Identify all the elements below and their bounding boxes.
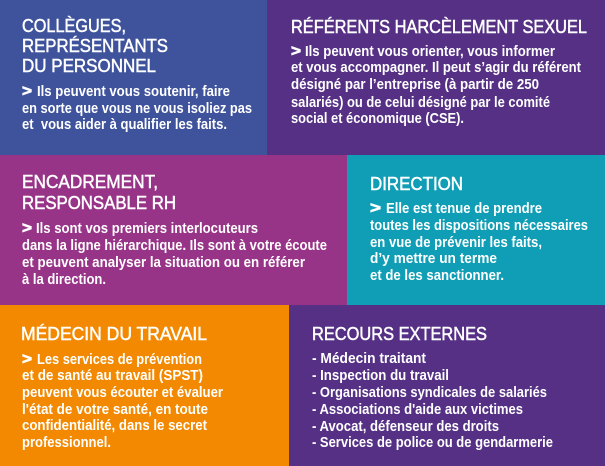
body text: direction [370,200,588,284]
panel background: magenta [0,155,347,305]
panel: encadrement, responsable RH [0,155,347,305]
list: recours externes [312,350,553,451]
body text: encadrement: et peuvent analyser la situation ou en référer [22,254,305,271]
body text: collègues: > [22,83,32,100]
body text: médecin du travail: peuvent vous écouter et évaluer [22,384,223,401]
body text: médecin du travail: et de santé au travail (SPST) [22,367,203,384]
panel: médecin du travail [0,305,289,466]
list: recours externes: - Services de police ou de gendarmerie [312,434,553,451]
list: recours externes: - Avocat, défenseur des droits [312,418,499,435]
body text: collègues: en sorte que vous ne vous isoliez pas [22,100,252,117]
panel background: teal [347,155,605,305]
heading: encadrement [22,171,176,213]
body text: référents: social et économique (CSE). [291,110,464,127]
heading: recours externes: RECOURS EXTERNES [312,323,487,344]
panel background: blue [0,0,267,155]
body text: direction: en vue de prévenir les faits, [370,234,542,251]
body text: médecin du travail: l'état de votre santé, en toute [22,401,208,418]
panel background: orange [0,305,289,466]
body text: référents: > [291,43,301,60]
body text: encadrement: Ils sont vos premiers interlocuteurs [36,220,258,237]
panel: recours externes [289,305,605,466]
panel: référents harcèlement sexuel [267,0,605,155]
panel background: purple [289,305,605,466]
list: recours externes: - Inspection du travail [312,367,449,384]
body text: collègues [22,83,252,133]
heading: collègues: COLLÈGUES, [22,15,126,36]
body text: médecin du travail: > [22,351,32,368]
body text: référents: salariés) ou de celui désigné par le comité [291,94,550,111]
body text: direction: > [370,200,381,217]
panel: collègues, représentants du personnel [0,0,267,155]
body text: médecin du travail: Les services de prévention [37,351,202,368]
body text: médecin du travail: confidentialité, dans le secret [22,417,207,434]
heading: direction: DIRECTION [370,173,463,194]
body text: référents: Ils peuvent vous orienter, vous informer [305,43,555,60]
panel: direction [347,155,605,305]
panel background: purple [267,0,605,155]
body text: encadrement: dans la ligne hiérarchique. Ils sont à votre écoute [22,237,327,254]
body text: médecin du travail [22,351,223,451]
list: recours externes: - Médecin traitant [312,350,426,367]
body text: médecin du travail: professionnel. [22,434,111,451]
body text: collègues: et vous aider à qualifier les faits. [22,116,227,133]
body text: encadrement: à la direction. [22,271,106,288]
body text: encadrement [22,220,327,288]
body text: référents [291,43,581,127]
heading: médecin du travail: MÉDECIN DU TRAVAIL [21,323,207,344]
heading: collègues [22,15,168,76]
heading: collègues: DU PERSONNEL [22,55,156,76]
heading: encadrement: ENCADREMENT, [22,171,158,192]
body text: direction: Elle est tenue de prendre [386,200,542,217]
heading: encadrement: RESPONSABLE RH [22,192,176,213]
list: recours externes: - Organisations syndicales de salariés [312,384,547,401]
body text: référents: désigné par l’entreprise (à partir de 250 [291,76,539,93]
heading: collègues: REPRÉSENTANTS [22,35,168,56]
list: recours externes: - Associations d'aide aux victimes [312,401,523,418]
body text: direction: d’y mettre un terme [370,250,497,267]
body text: collègues: Ils peuvent vous soutenir, faire [37,83,230,100]
body text: direction: et de les sanctionner. [370,267,504,284]
body text: encadrement: > [22,220,32,237]
